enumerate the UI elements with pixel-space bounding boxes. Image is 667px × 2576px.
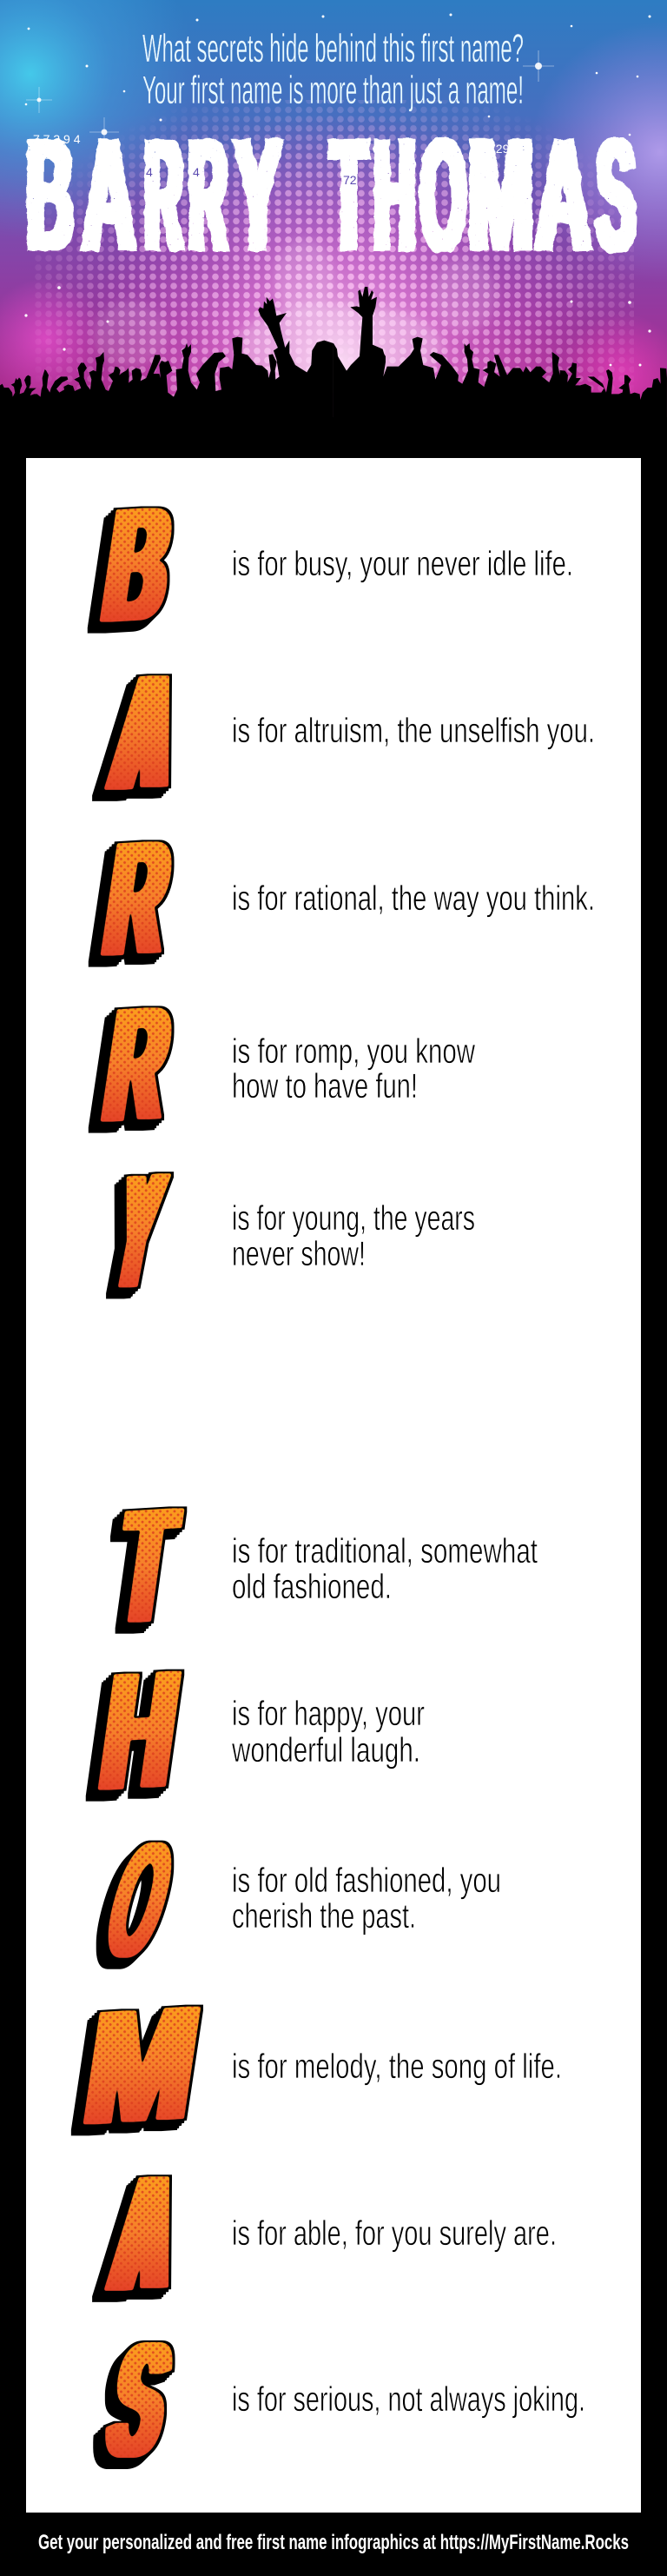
row: R: [87, 807, 595, 990]
text: O lines: cherish the past.: [232, 1897, 416, 1935]
comic letter Y: [106, 1172, 174, 1298]
comic letter A: A: [107, 2142, 184, 2325]
text: Y lines: is for young, the years: [232, 1199, 475, 1238]
crowd silhouette: [0, 287, 667, 458]
row: T: [87, 1476, 538, 1657]
row: M: [69, 1972, 562, 2159]
row: A: [87, 641, 595, 824]
comic letter Y: Y: [104, 1139, 173, 1323]
comic letter R: [89, 840, 174, 967]
text: T lines: [232, 1532, 538, 1606]
title: BARRY THOMAS: H: [374, 106, 415, 283]
text: H lines: [231, 1695, 425, 1769]
title: BARRY THOMAS: O: [420, 106, 466, 283]
row: B: [87, 474, 573, 656]
header banner with concert background: [0, 0, 667, 417]
comic letter B: B: [95, 474, 181, 656]
comic letter R: R: [96, 807, 179, 990]
text: O lines: is for old fashioned, you: [232, 1862, 501, 1900]
comic letter S: S: [97, 2308, 182, 2492]
text: A second line: is for able, for you surely are.: [232, 2214, 557, 2253]
title: BARRY THOMAS: [26, 106, 637, 283]
comic letter H: H: [93, 1637, 187, 1825]
title: BARRY THOMAS: S: [597, 106, 635, 283]
title: BARRY THOMAS: B: [27, 106, 73, 283]
title: BARRY THOMAS: A: [83, 106, 135, 283]
row: H: [83, 1637, 425, 1825]
subtitle lines: [142, 26, 524, 112]
title distress digits: 4: [146, 165, 153, 179]
title distress digits: [33, 132, 510, 187]
comic letter A: [92, 674, 172, 801]
white panel background: [26, 458, 641, 2513]
title distress digits: 72: [343, 173, 357, 187]
row: Y: [106, 1172, 474, 1298]
text: H lines: is for happy, your: [232, 1695, 425, 1733]
text: R second lines: how to have fun!: [232, 1067, 418, 1105]
text: R second lines: [232, 1032, 475, 1105]
comic letter A: A: [107, 641, 184, 824]
text: H lines: wonderful laugh.: [231, 1731, 420, 1769]
star sparkles: [24, 14, 651, 367]
text: O lines: [232, 1862, 501, 1935]
colored light glows: [0, 0, 667, 458]
title distress digits: 4: [193, 165, 200, 179]
title: BARRY THOMAS: R: [189, 106, 227, 283]
text: T lines: old fashioned.: [232, 1568, 392, 1606]
title: BARRY THOMAS: T: [331, 106, 367, 283]
title distress digits: 7 7 3 9 4: [33, 132, 81, 146]
text: Y lines: [232, 1199, 475, 1273]
title: BARRY THOMAS: R: [145, 106, 182, 283]
row: O: [83, 1808, 501, 1991]
comic letter R: R: [96, 973, 179, 1156]
smoke clouds: [94, 240, 496, 391]
comic letter O: O: [90, 1808, 189, 1991]
text: R second lines: is for romp, you know: [232, 1032, 475, 1071]
comic letter B: [87, 506, 175, 634]
title: BARRY THOMAS: Y: [234, 106, 281, 283]
row: A second: [87, 2142, 557, 2325]
comic letter T: T: [109, 1476, 184, 1657]
comic letter M: M: [76, 1972, 208, 2159]
title: BARRY THOMAS: A: [536, 106, 591, 283]
comic letter R: [89, 1006, 174, 1133]
text: Y lines: never show!: [232, 1235, 366, 1273]
sky gradient: [0, 0, 667, 458]
text: T lines: is for traditional, somewhat: [232, 1532, 538, 1570]
title: BARRY THOMAS: M: [468, 106, 533, 283]
row: R second: [87, 973, 475, 1156]
row: S: [87, 2308, 585, 2492]
title distress digits: 729: [489, 142, 510, 156]
LED dot wall: [35, 100, 634, 396]
